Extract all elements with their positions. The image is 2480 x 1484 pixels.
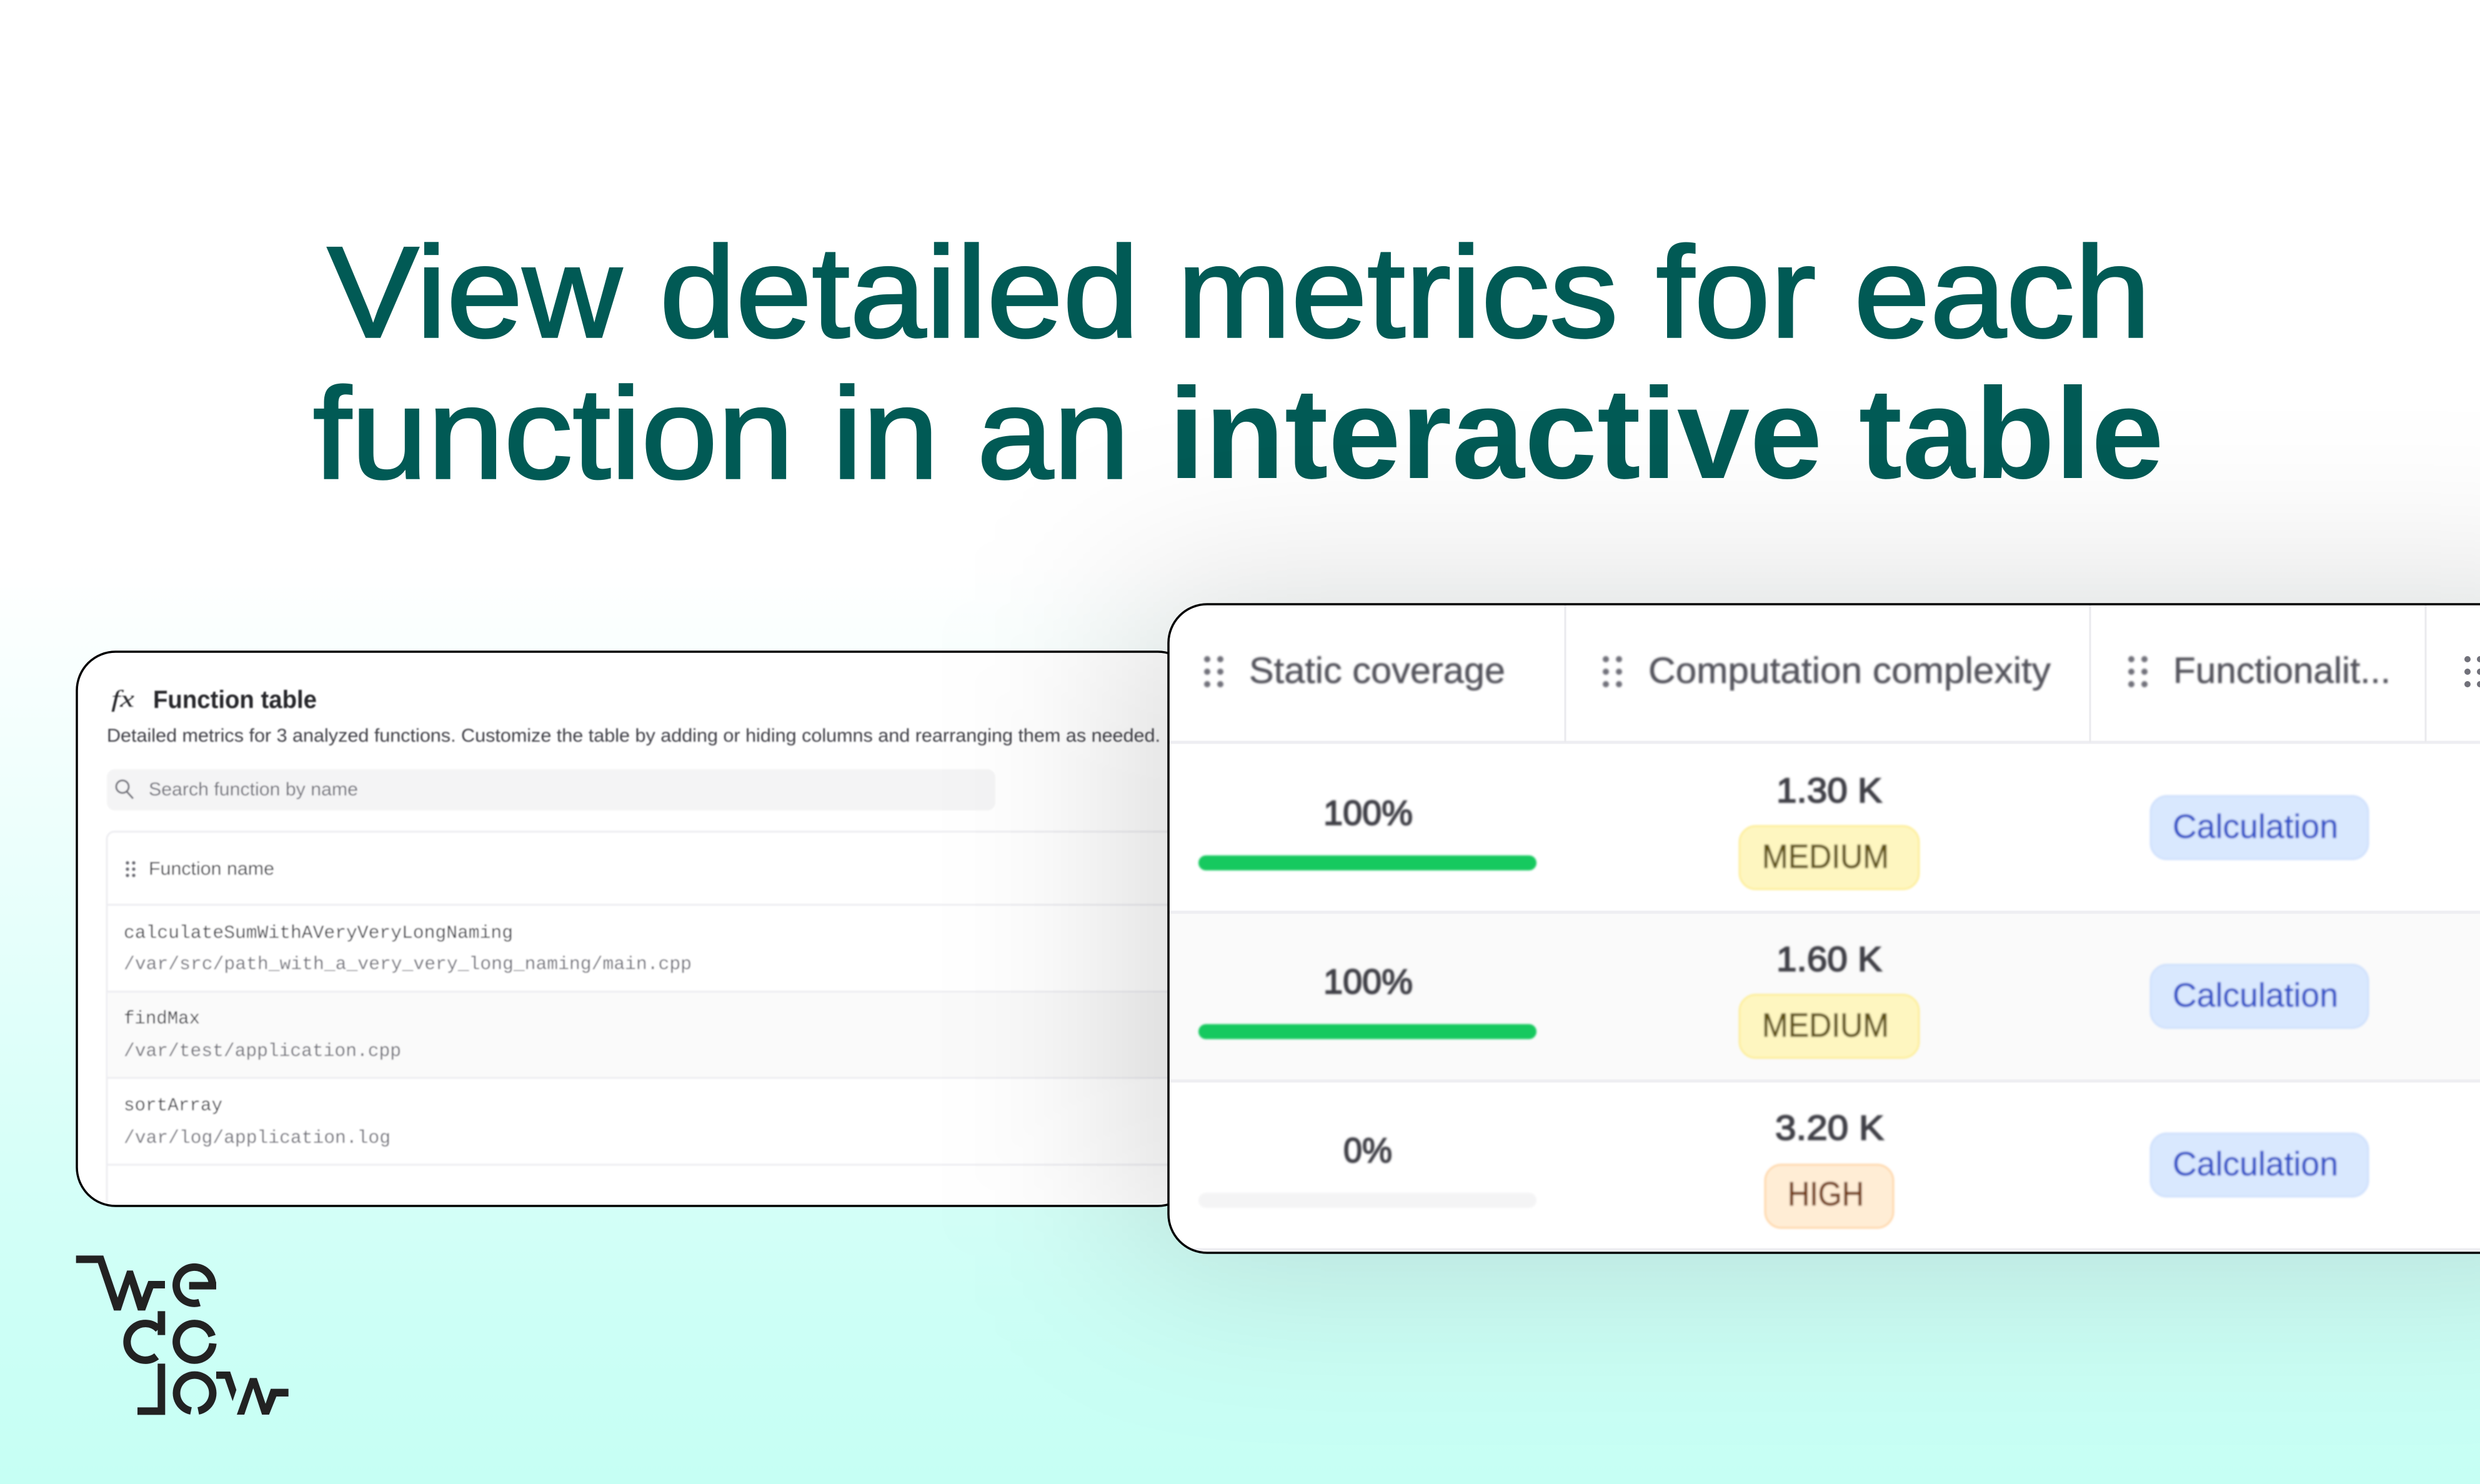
icon: drag handle of cut-off column [2464,656,2480,687]
row: calculateSumWithAVeryVeryLongNaming: calculateSumWithAVeryVeryLongNaming [124,923,513,944]
row 2 metrics: MEDIUM [1762,1007,1889,1044]
icon: wedolow logo [76,1255,289,1415]
icon: drag handle [126,861,136,877]
alternate row background [1168,912,2480,1081]
title: interactive table [1168,361,2164,505]
table rows [107,832,1226,1219]
row 3 metrics: 3.20 K [1775,1108,1884,1147]
row 3 metrics: 0% [1343,1130,1392,1170]
title: View detailed metrics for each [327,220,2151,364]
column header: functionality: Functionalit... [2173,650,2391,691]
row 3 metrics: HIGH [1788,1175,1864,1213]
panel heading icon: fx: fx [111,686,134,712]
row: calculateSumWithAVeryVeryLongNaming: /var/src/path_with_a_very_very_long_naming/main.cpp [124,954,692,975]
row 3 metrics [1198,1108,2368,1228]
title [313,220,2164,505]
shadow of metrics panel [1131,600,2480,1256]
row 1 metrics: 100% [1323,793,1413,832]
row 1 metrics [1198,770,2368,889]
panel description: Detailed metrics for 3 analyzed functions. Customize the table by adding or hiding columns and rearranging them as needed. [107,725,1160,746]
row: calculateSumWithAVeryVeryLongNaming [124,923,692,975]
row 1 metrics: 1.30 K [1776,770,1882,810]
row: sortArray: sortArray [124,1095,222,1117]
row: findMax [124,1008,401,1062]
icon: search [116,780,133,799]
search field [107,769,995,810]
panel: metrics table [1168,604,2480,1253]
row 2 metrics: 1.60 K [1776,939,1882,979]
row: findMax: findMax [124,1008,200,1030]
column header: computation complexity: Computation complexity [1648,650,2051,691]
panel heading: Function table [153,686,317,714]
row 2 metrics: 100% [1323,962,1413,1001]
row: sortArray: /var/log/application.log [124,1128,391,1149]
row: sortArray [124,1095,391,1149]
search placeholder: Search function by name [149,779,358,800]
row: findMax: /var/test/application.cpp [124,1041,401,1062]
panel: function table [77,652,1226,1219]
row 2 metrics [1198,939,2368,1058]
row 3 metrics: Calculation [2173,1145,2338,1183]
column header: static coverage: Static coverage [1249,650,1505,691]
icon: drag handle [1204,656,1223,687]
row 2 metrics: Calculation [2173,977,2338,1014]
icon: drag handle [2128,656,2148,687]
icon: drag handle [1603,656,1622,687]
title: function in an [313,361,1130,505]
column header: function name: Function name [149,859,274,879]
row 1 metrics: Calculation [2173,808,2338,845]
row 1 metrics: MEDIUM [1762,838,1889,875]
